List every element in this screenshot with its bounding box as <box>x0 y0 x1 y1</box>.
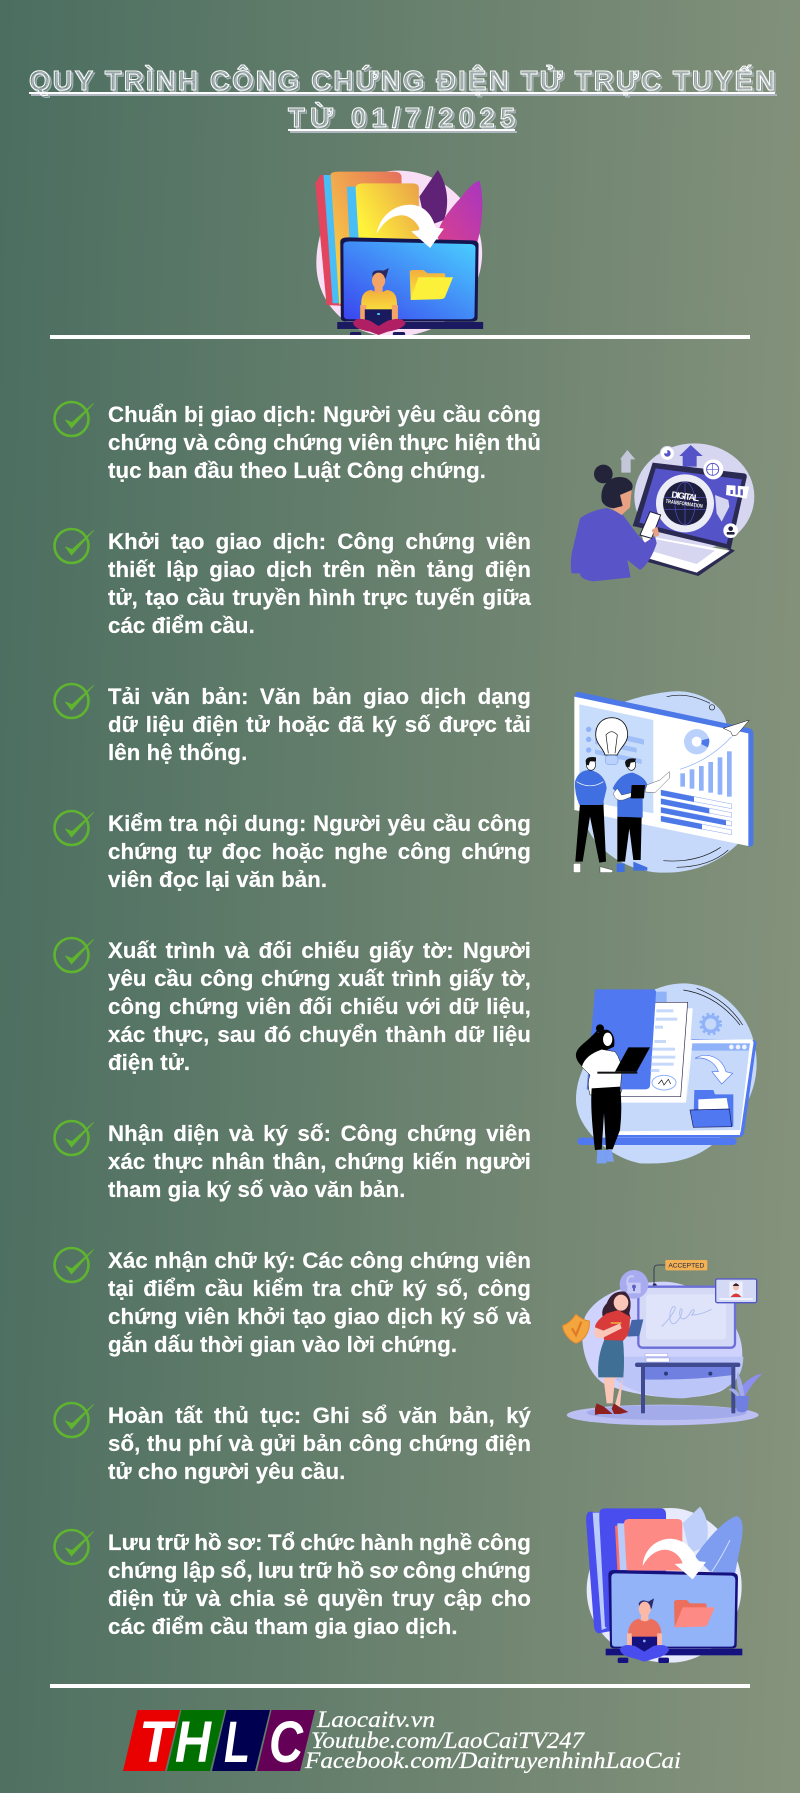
step 3 text: lên hệ thống. <box>108 740 247 765</box>
step 1 text: tục ban đầu theo Luật Công chứng. <box>108 458 486 483</box>
tag: accepted: ACCEPTED <box>668 1262 705 1269</box>
step 1 text: Chuẩn bị giao dịch: Người yêu cầu công <box>108 402 541 427</box>
figure: woman with laptop <box>576 1024 650 1163</box>
figure: person with laptop <box>618 1598 669 1663</box>
step 9 text: các điểm cầu tham gia giao dịch. <box>108 1614 458 1639</box>
step 8 text: tử cho người yêu cầu. <box>108 1459 345 1484</box>
icon: plant <box>728 1372 763 1412</box>
illustration: two people with charts <box>573 691 753 873</box>
illustration: digital transformation: TRANSFORMATION <box>665 499 703 510</box>
figure: left person <box>573 757 613 873</box>
figure: right person <box>613 758 669 872</box>
icon: check 5 <box>54 938 94 972</box>
step 1 text: chứng và công chứng viên thực hiện thủ <box>108 430 541 455</box>
divider bottom <box>50 1684 750 1688</box>
icon: check 3 <box>54 684 94 718</box>
step 3 text: Tải văn bản: Văn bản giao dịch dạng <box>108 684 531 709</box>
figure: woman with phone <box>571 465 661 581</box>
icon: check 4 <box>54 811 94 845</box>
step 7 text <box>108 1248 531 1357</box>
logo: THLC: L <box>224 1710 250 1775</box>
step 4 text: Kiểm tra nội dung: Người yêu cầu công <box>108 811 531 836</box>
icon: padlock <box>620 1270 648 1299</box>
icon: check 1 <box>54 402 94 436</box>
step 9 text: Lưu trữ hồ sơ: Tổ chức hành nghề công <box>108 1530 531 1555</box>
logo: THLC <box>123 1710 315 1775</box>
step 5 text: điện tử. <box>108 1050 190 1075</box>
signature board <box>638 1287 735 1348</box>
logo: THLC: C <box>269 1710 304 1775</box>
logo: THLC: T <box>139 1710 176 1775</box>
browser window <box>612 1039 757 1137</box>
step 1 text <box>108 402 541 483</box>
step 8 text: Hoàn tất thủ tục: Ghi sổ văn bản, ký <box>108 1403 531 1428</box>
step 3 text <box>108 684 531 765</box>
icon: curved arrow <box>377 205 444 248</box>
step 2 text: các điểm cầu. <box>108 613 255 638</box>
footer links: Laocaitv.vn <box>316 1707 435 1732</box>
step 5 text: công chứng viên đối chiếu với dữ liệu, <box>108 994 531 1019</box>
tag: accepted <box>665 1260 707 1270</box>
illustration: digital transformation: DIGITAL <box>671 489 700 503</box>
icon: check 7 <box>54 1248 94 1282</box>
step 5 text <box>108 938 531 1075</box>
step 2 text: thiết lập giao dịch trên nền tảng điện <box>108 557 531 582</box>
footer links <box>304 1707 681 1773</box>
icon: curved arrow <box>643 1539 706 1579</box>
step 4 text: chứng tự đọc hoặc nghe công chứng <box>108 839 531 864</box>
step 3 text: dữ liệu điện tử hoặc đã ký số được tải <box>108 712 531 737</box>
figure: person with laptop <box>350 268 406 337</box>
step 9 text <box>108 1530 531 1639</box>
illustration: folders and laptop bottom <box>586 1507 743 1663</box>
illustration: folders and laptop hero <box>315 170 483 337</box>
illustration: woman signing with board <box>563 1260 763 1425</box>
illustration: woman with documents and folder <box>576 983 757 1163</box>
footer links: Youtube.com/LaoCaiTV247 <box>311 1728 586 1753</box>
icon: shield <box>563 1314 589 1343</box>
step 8 text: số, thu phí và gửi bản công chứng điện <box>108 1431 531 1456</box>
step 2 text <box>108 529 532 638</box>
step 7 text: chứng viên khởi tạo giao dịch ký số và <box>108 1304 531 1329</box>
step 7 text: gắn dấu thời gian vào lời chứng. <box>108 1332 457 1357</box>
step 8 text <box>108 1403 531 1484</box>
title: TỪ 01/7/2025 <box>288 102 515 133</box>
step 9 text: điện tử và chia sẻ quyền truy cập cho <box>108 1586 531 1611</box>
step 2 text: tử, tạo cầu truyền hình trực tuyến giữa <box>108 585 531 610</box>
step 4 text: viên đọc lại văn bản. <box>108 867 327 892</box>
step 5 text: xác thực, sau đó chuyển thành dữ liệu <box>108 1022 531 1047</box>
title: QUY TRÌNH CÔNG CHỨNG ĐIỆN TỬ TRỰC TUYẾN <box>29 64 775 96</box>
step 6 text: xác thực nhân thân, chứng kiến người <box>108 1149 531 1174</box>
video card <box>716 1279 757 1303</box>
icon: check 8 <box>54 1403 94 1437</box>
step 2 text: Khởi tạo giao dịch: Công chứng viên <box>108 529 531 554</box>
illustration: digital transformation <box>571 443 754 581</box>
icon: check 9 <box>54 1530 94 1564</box>
step 7 text: tại điểm cầu kiểm tra chữ ký số, công <box>108 1276 531 1301</box>
step 6 text <box>108 1121 531 1202</box>
icon: light bulb <box>596 718 628 765</box>
step 6 text: tham gia ký số vào văn bản. <box>108 1177 405 1202</box>
step 9 text: chứng lập sổ, lưu trữ hồ sơ công chứng <box>108 1558 531 1583</box>
step 6 text: Nhận diện và ký số: Công chứng viên <box>108 1121 531 1146</box>
icon: paper plane <box>723 720 749 736</box>
desk <box>635 1353 740 1413</box>
icon: check 6 <box>54 1121 94 1155</box>
step 4 text <box>108 811 531 892</box>
divider top <box>50 335 750 339</box>
step 7 text: Xác nhận chữ ký: Các công chứng viên <box>108 1248 531 1273</box>
step 5 text: yêu cầu công chứng xuất trình giấy tờ, <box>108 966 531 991</box>
icon: folder <box>410 270 453 300</box>
title <box>29 64 775 133</box>
icon: check 2 <box>54 529 94 563</box>
icon: folder <box>674 1600 715 1627</box>
footer links: Facebook.com/DaitruyenhinhLaoCai <box>304 1748 681 1773</box>
step 5 text: Xuất trình và đối chiếu giấy tờ: Người <box>108 938 531 963</box>
logo: THLC: H <box>175 1710 212 1775</box>
icon: gear <box>701 1014 721 1034</box>
figure: woman signing <box>594 1291 643 1415</box>
